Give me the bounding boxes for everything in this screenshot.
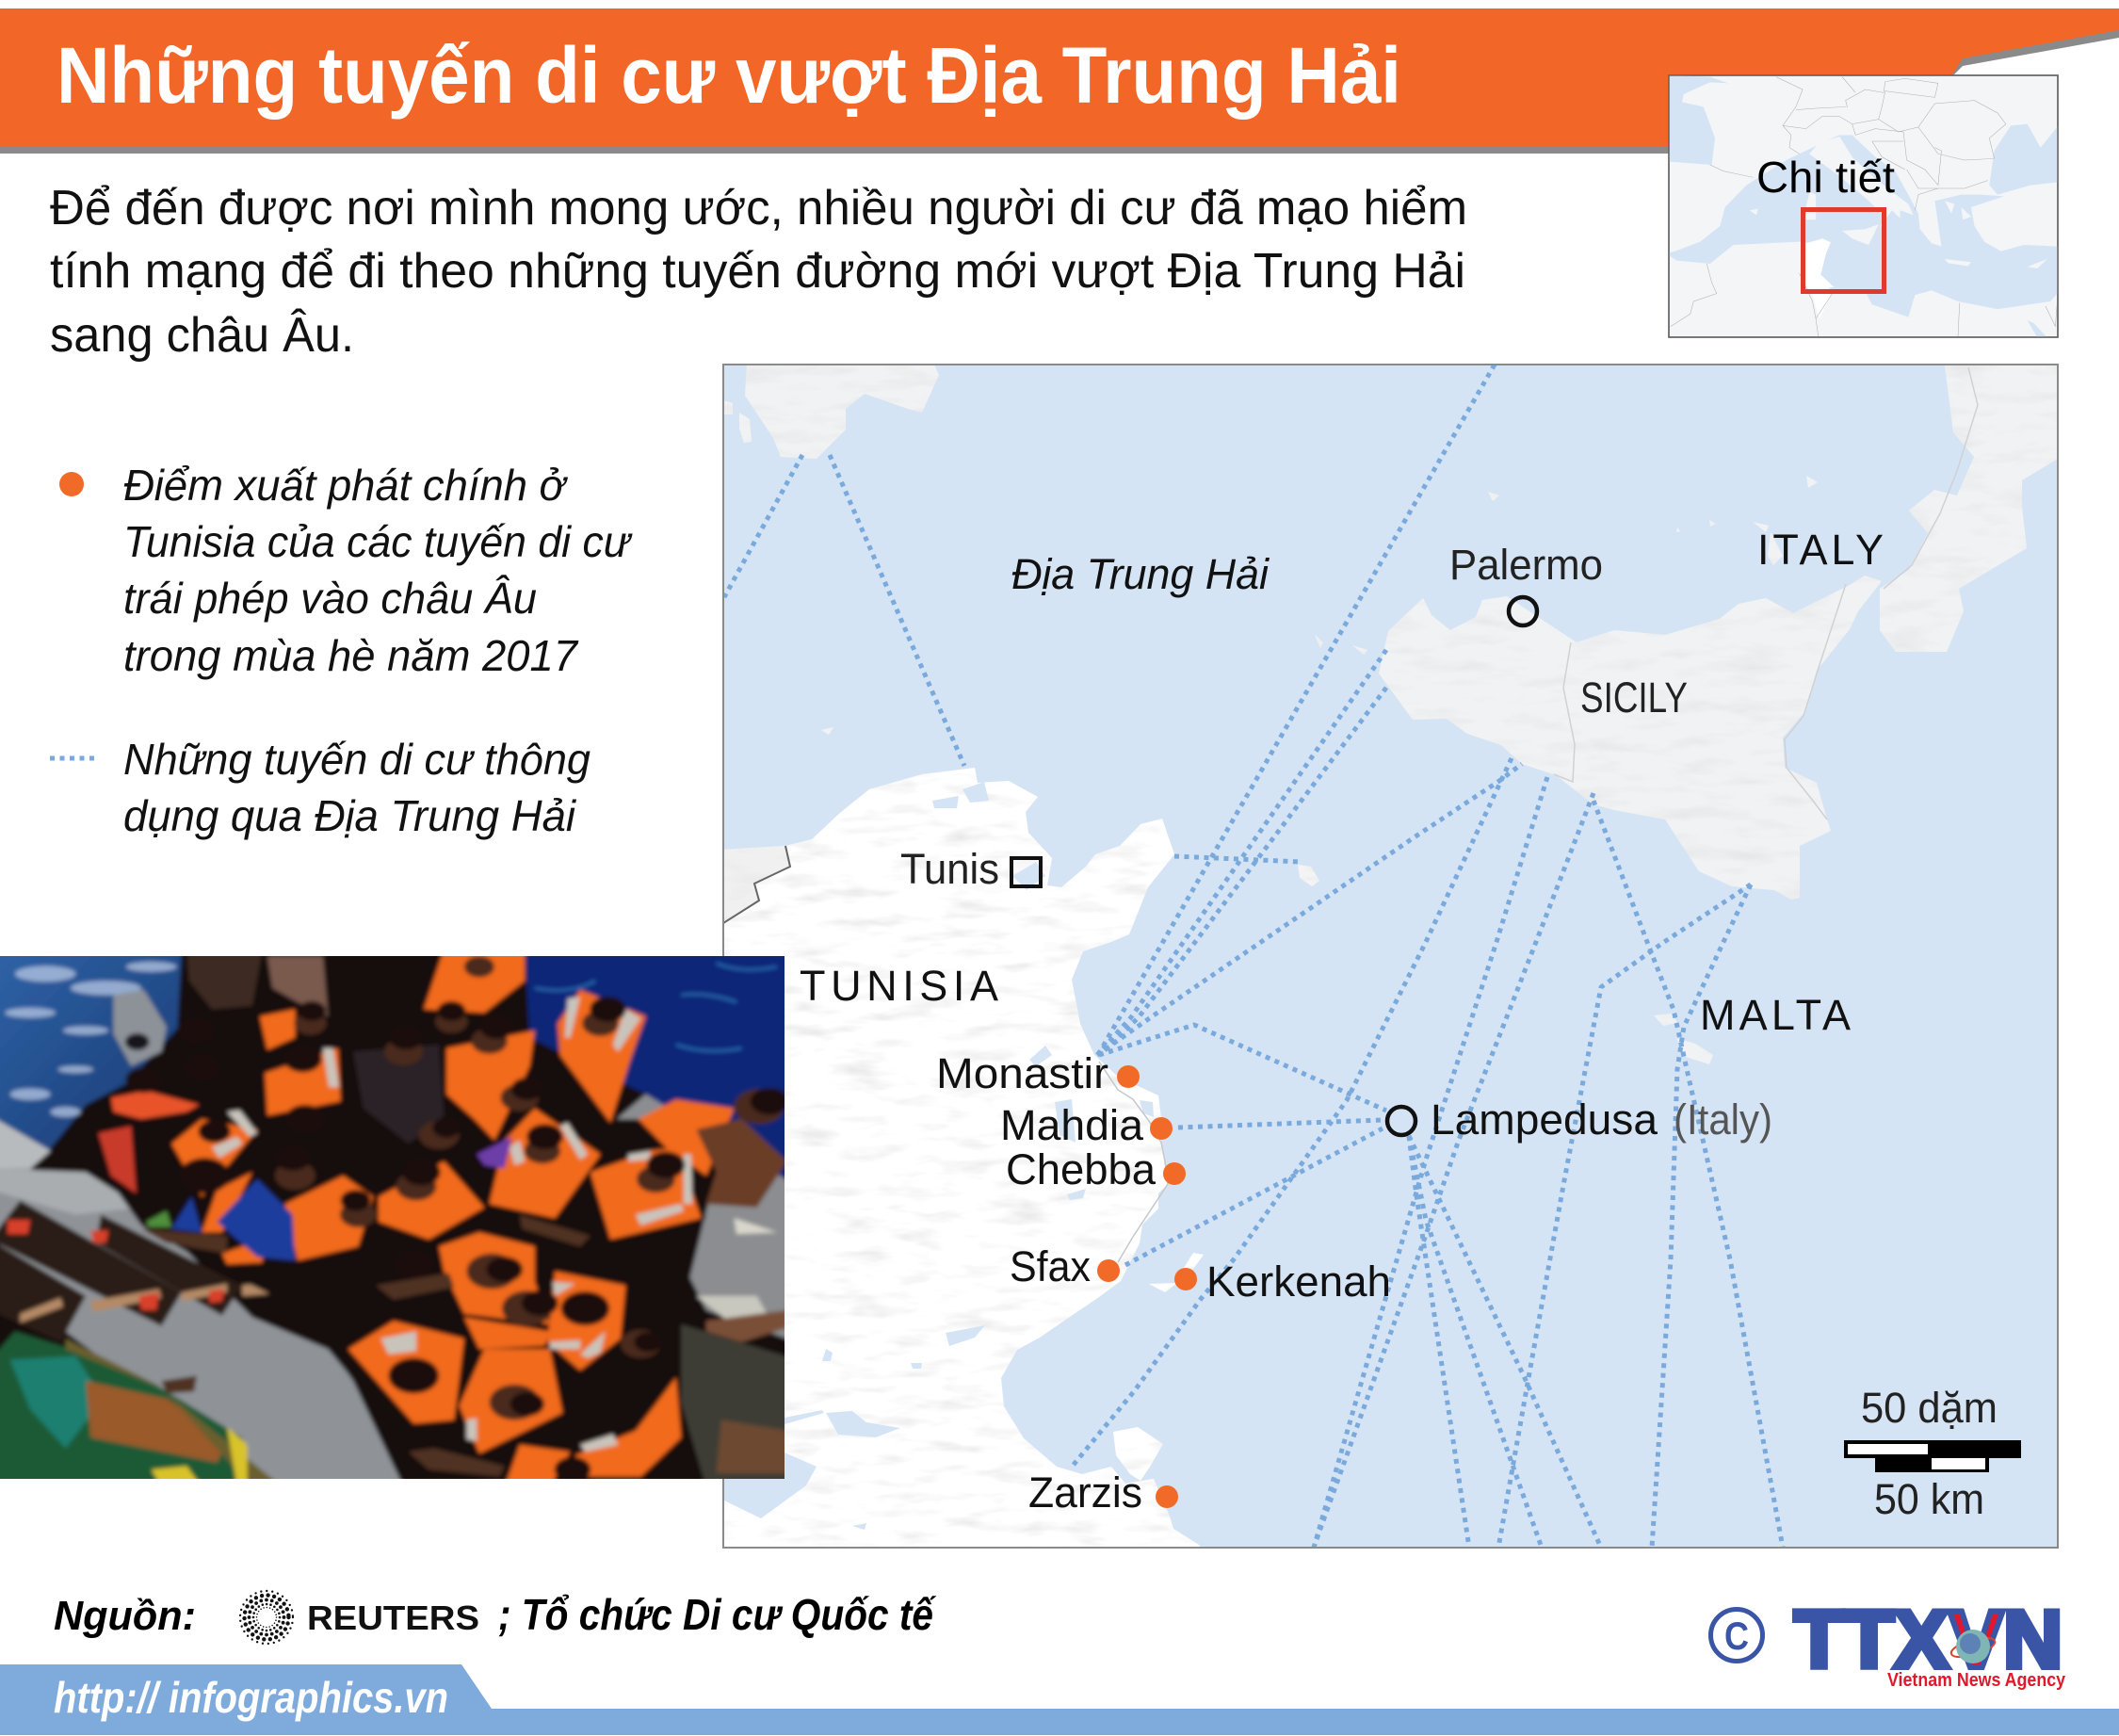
region label: Sicily: SICILY [1580, 673, 1688, 722]
migration routes [724, 365, 1783, 1548]
heads [125, 956, 685, 1483]
land: Algeria edge [723, 846, 790, 923]
country label: Malta: MALTA [1700, 991, 1851, 1039]
legend item: departure points: Điểm xuất phát chính ở [123, 461, 568, 510]
departure point: Chebba: Chebba [1006, 1145, 1157, 1193]
city: Palermo [1449, 541, 1603, 625]
inset land: Italy boot and islands [1750, 137, 2047, 268]
inset sea areas [1670, 75, 2059, 337]
boat tubes [0, 1149, 405, 1479]
logo: TTXVN Vietnam News Agency: Vietnam News Agency [1887, 1670, 2066, 1691]
main map [723, 365, 2058, 1548]
website url: http:// infographics.vn [54, 1673, 448, 1722]
inset highlight square [1803, 209, 1884, 292]
reflective strips [212, 997, 692, 1452]
land: Kerkenah [1149, 1253, 1204, 1292]
land masses [723, 365, 2058, 1548]
city: Tunis: Tunis [900, 845, 999, 893]
intro text: Để đến được nơi mình mong ước, nhiều người di cư đã mạo hiểm [50, 181, 1467, 235]
footer band [0, 1664, 2119, 1735]
water right [676, 1322, 785, 1479]
arms [141, 1214, 590, 1477]
scale bar [1844, 1384, 2021, 1523]
crowd [101, 949, 732, 1487]
intro text: tính mạng để đi theo những tuyến đường mới vượt Địa Trung Hải [50, 244, 1465, 299]
departure point: Sfax: Sfax [1010, 1242, 1091, 1290]
logo: Reuters dotted sphere [240, 1591, 293, 1644]
legend item: migration routes: dụng qua Địa Trung Hải [123, 791, 577, 840]
departure point: Zarzis: Zarzis [1028, 1468, 1142, 1517]
land: Pantelleria [1298, 865, 1319, 886]
inset locator map [1669, 75, 2059, 337]
borders [723, 846, 790, 923]
land: small islands [723, 400, 1818, 735]
land: Italy [1880, 365, 2058, 652]
blue and purple clothing [171, 1179, 295, 1260]
legend item: departure points: trong mùa hè năm 2017 [123, 631, 578, 680]
legend item: departure points [59, 461, 633, 680]
logo: TTXVN Vietnam News Agency: C [1724, 1614, 1749, 1658]
logo: TTXVN Vietnam News Agency: TTXVN [1794, 1595, 2062, 1685]
land: Sicily [1379, 576, 1882, 900]
source line: REUTERS [307, 1598, 479, 1637]
legend item: migration routes [50, 735, 590, 840]
country label: Tunisia: TUNISIA [800, 962, 998, 1010]
source line [54, 1590, 937, 1644]
scale bar: 50 dặm [1861, 1384, 1998, 1432]
photo: migrants in life jackets on a rubber boat [0, 949, 797, 1487]
source line: Nguồn: [54, 1593, 196, 1639]
island: Lampedusa [1387, 1095, 1772, 1144]
shirtless man [696, 1119, 787, 1208]
outboard motor [114, 990, 167, 1066]
source line: ; Tổ chức Di cư Quốc tế [498, 1590, 937, 1639]
legend item: departure points: trái phép vào châu Âu [123, 574, 537, 623]
legend item: departure points: Tunisia của các tuyến di cư [123, 517, 633, 566]
country label: Italy: ITALY [1757, 526, 1884, 574]
lakes and chotts [723, 782, 1154, 1530]
departure point: Mahdia: Mahdia [1000, 1101, 1144, 1149]
inset country borders [1671, 77, 2059, 337]
inset land: Tunisia highlighted [1806, 238, 1834, 318]
intro text: sang châu Âu. [50, 308, 354, 363]
legend [50, 461, 633, 840]
header banner [0, 8, 2119, 154]
title: Những tuyến di cư vượt Địa Trung Hải [57, 31, 1401, 120]
departure point: Monastir: Monastir [936, 1049, 1108, 1097]
boarding ladder [0, 1200, 242, 1342]
departure point: Kerkenah: Kerkenah [1206, 1257, 1391, 1306]
land: Tunisia [723, 768, 1201, 1548]
scale bar: 50 km [1874, 1475, 1984, 1523]
intro text [50, 181, 1467, 363]
legend item: migration routes: Những tuyến di cư thông [123, 735, 590, 784]
island: Lampedusa: (Italy) [1674, 1095, 1772, 1144]
island: Lampedusa: Lampedusa [1431, 1095, 1658, 1144]
life jackets [98, 949, 734, 1487]
sea label: Địa Trung Hải [1011, 550, 1270, 598]
ship hull [0, 1331, 252, 1487]
land: Sardinia [745, 365, 939, 459]
inset label: Chi tiết [1756, 153, 1895, 202]
city: Palermo: Palermo [1449, 541, 1603, 589]
land: Djerba [1113, 1427, 1163, 1481]
land: Malta [1654, 1014, 1713, 1064]
